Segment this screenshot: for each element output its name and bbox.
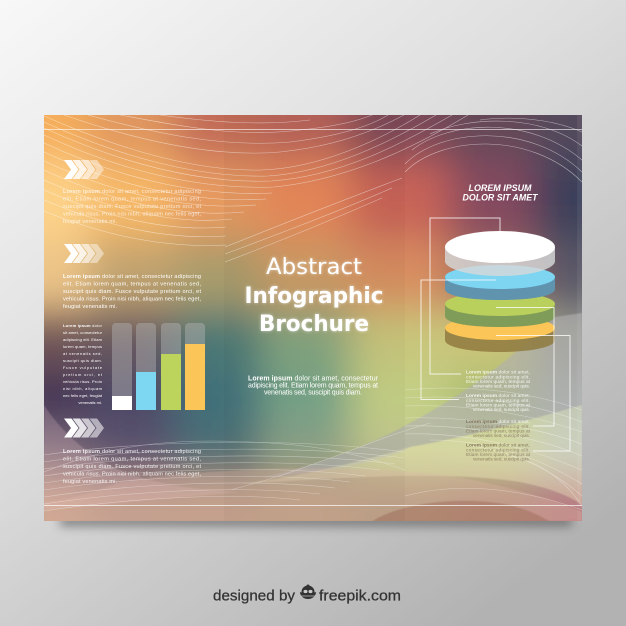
title: Brochure <box>259 312 369 337</box>
item 3: consectetur adipiscing elit. <box>466 424 530 430</box>
fold shading <box>445 115 582 352</box>
heading: right panel: LOREM IPSUM <box>468 183 533 194</box>
text block: narrow text beside bars: lorem quam, tempus <box>63 344 102 349</box>
item 2: Etiam lorem quam, tempus at <box>466 402 531 408</box>
disc: green <box>445 292 555 327</box>
text block: centre panel: venenatis sed, suscipit quis diam. <box>264 390 362 396</box>
text block: left panel 1 <box>63 189 201 225</box>
icon: chevron row 2 <box>64 244 104 263</box>
text block: left panel 2: Lorem ipsum dolor sit amet, consectetur adipiscing <box>63 274 201 280</box>
item 1: consectetur adipiscing elit. <box>466 374 530 380</box>
text block: narrow text beside bars: nisi nibh, aliquam <box>63 386 103 391</box>
title: Infographic <box>244 284 384 309</box>
bar 4 <box>185 323 205 410</box>
text block: left panel 3: elit. Etiam lorem quam, tempus at venenatis sed, <box>63 456 201 462</box>
text block: left panel 3: Lorem ipsum dolor sit amet, consectetur adipiscing <box>63 449 201 455</box>
item 1: Etiam lorem quam, tempus at <box>466 379 531 385</box>
item 3: Lorem ipsum dolor sit amet, <box>466 419 530 425</box>
text block: narrow text beside bars: suscipit quis diam. <box>63 358 102 363</box>
text block: left panel 3: feugiat venenatis mi. <box>63 479 117 485</box>
text block: right panel items <box>466 370 531 462</box>
text block: left panel 1: vehicula risus. Proin nisi nibh, aliquam nec felis eget, <box>63 212 201 218</box>
text block: left panel 2: elit. Etiam lorem quam, tempus at venenatis sed, <box>63 282 201 288</box>
text block: narrow text beside bars: Lorem ipsum dolor <box>63 323 103 328</box>
title: Abstract <box>266 255 362 280</box>
text block: left panel 2 <box>63 274 201 310</box>
fine white contour lines bottom <box>44 388 582 511</box>
item 1 <box>466 370 531 390</box>
bar 3 <box>161 323 181 410</box>
text block: left panel 3: suscipit quis diam. Fusce vulputate pretium orci, et <box>63 464 201 470</box>
title <box>244 255 384 337</box>
item 1: venenatis sed, suscipit quis. <box>473 384 530 390</box>
text block: narrow text beside bars: adipiscing elit. Etiam <box>63 337 103 342</box>
text block: centre panel: adipiscing elit. Etiam lorem quam, tempus at <box>248 382 378 390</box>
item 4 <box>466 442 531 462</box>
item 4: venenatis sed, suscipit quis. <box>473 456 530 462</box>
text block: centre panel <box>248 376 379 396</box>
credit line: freepik.com <box>319 588 401 604</box>
text block: left panel 1: feugiat venenatis mi. <box>63 219 117 225</box>
item 3: Etiam lorem quam, tempus at <box>466 428 531 434</box>
item 2: venenatis sed, suscipit quis. <box>473 407 530 413</box>
item 4: consectetur adipiscing elit. <box>466 448 530 454</box>
text block: narrow text beside bars <box>63 323 103 405</box>
disc: blue <box>445 265 555 300</box>
text block: narrow text beside bars: Fusce vulputate <box>63 365 103 370</box>
icon: freepik logo <box>300 584 316 599</box>
item 4: Lorem ipsum dolor sit amet, <box>466 442 530 448</box>
text block: narrow text beside bars: pretium orci, et <box>63 372 103 377</box>
text block: narrow text beside bars: sit amet, consectetur <box>63 330 103 335</box>
icon: chevron row 3 <box>64 418 104 438</box>
brochure shadow <box>60 516 572 526</box>
translucent wave shapes <box>44 313 582 525</box>
text block: left panel 2: feugiat venenatis mi. <box>63 304 117 310</box>
bar 2 <box>136 323 156 410</box>
heading: right panel: DOLOR SIT AMET <box>462 192 539 204</box>
fine white contour lines top <box>44 115 582 262</box>
disc: white <box>445 231 555 276</box>
text block: narrow text beside bars: at venenatis sed, <box>63 351 102 356</box>
text block: left panel 1: elit. Etiam lorem quam, tempus at venenatis sed, <box>63 196 201 202</box>
text block: left panel 3 <box>63 449 201 485</box>
text block: left panel 2: vehicula risus. Proin nisi nibh, aliquam nec felis eget, <box>63 296 201 302</box>
text block: narrow text beside bars: venenatis mi. <box>78 400 102 405</box>
credit line: designed by <box>213 588 296 604</box>
bar chart <box>112 323 205 410</box>
title: Infographic <box>244 284 384 309</box>
stacked disc diagram <box>445 231 555 352</box>
icon: chevron row 1 <box>64 160 104 179</box>
connector lines <box>421 218 570 451</box>
text block: narrow text beside bars: vehicula risus. Proin <box>63 379 102 384</box>
item 4: Etiam lorem quam, tempus at <box>466 452 531 458</box>
text block: narrow text beside bars: nec felis eget, feugiat <box>63 393 103 398</box>
item 1: Lorem ipsum dolor sit amet, <box>466 370 530 376</box>
heading: right panel <box>462 183 539 204</box>
brochure <box>44 115 582 521</box>
item 2: Lorem ipsum dolor sit amet, <box>466 393 530 399</box>
title: Abstract <box>266 255 362 280</box>
text block: left panel 3: vehicula risus. Proin nisi nibh, aliquam nec felis eget, <box>63 472 201 478</box>
horizontal top and bottom rules <box>44 129 582 506</box>
item 3: venenatis sed, suscipit quis. <box>473 433 530 439</box>
item 2: consectetur adipiscing elit. <box>466 398 530 404</box>
title: Brochure <box>259 312 369 337</box>
text block: left panel 2: suscipit quis diam. Fusce vulputate pretium orci, et <box>63 289 201 295</box>
disc: yellow <box>445 316 555 352</box>
blurred colour field <box>44 115 582 521</box>
item 3 <box>466 419 531 439</box>
bar 1 <box>112 323 132 410</box>
credit line <box>213 584 401 604</box>
item 2 <box>466 393 531 413</box>
text block: left panel 1: suscipit quis diam. Fusce vulputate pretium orci, et <box>63 204 201 210</box>
text block: left panel 1: Lorem ipsum dolor sit amet, consectetur adipiscing <box>63 189 201 195</box>
text block: centre panel: Lorem ipsum dolor sit amet, consectetur <box>248 376 379 382</box>
